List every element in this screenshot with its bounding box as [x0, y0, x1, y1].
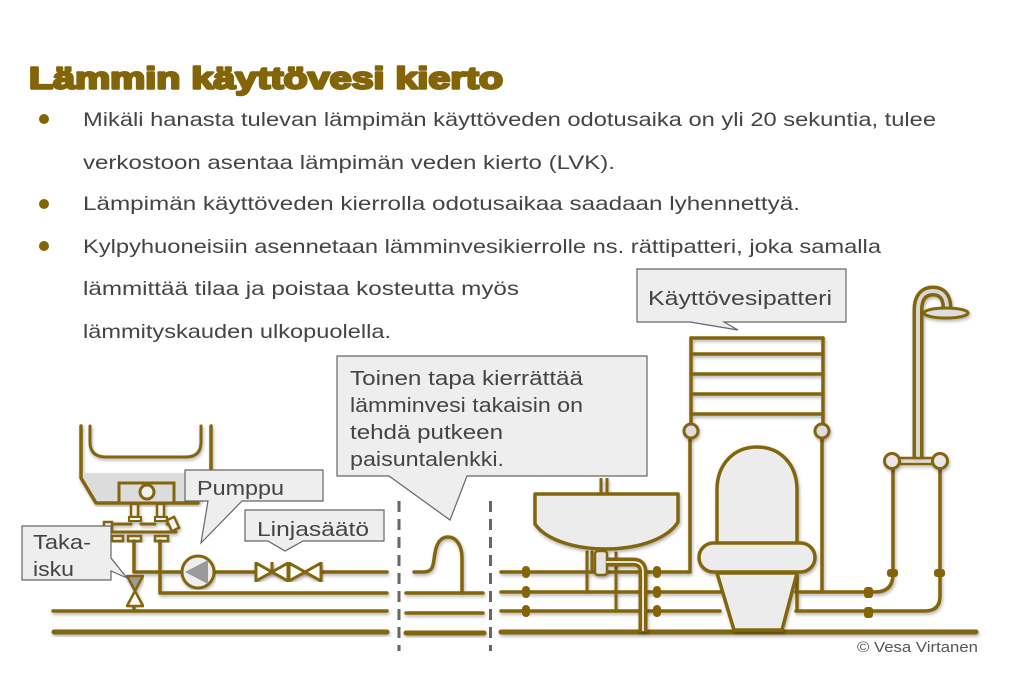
copyright: © Vesa Virtanen [857, 639, 978, 656]
water heater [81, 426, 211, 503]
right pipes [501, 437, 976, 632]
title: Lämmin käyttövesi kierto [29, 60, 503, 96]
callout: Pumppu: Pumppu [197, 478, 284, 500]
bullet list: verkostoon asentaa lämpimän veden kierto (LVK). [83, 152, 615, 174]
bullet list: lämmittää tilaa ja poistaa kosteutta myös [83, 278, 519, 300]
check valve [127, 576, 143, 606]
pipe couplings [522, 566, 945, 618]
callout: Taka-isku: isku [33, 559, 74, 581]
callout: expansion loop: lämminvesi takaisin on [350, 395, 583, 417]
shower [884, 291, 968, 468]
callout: Taka-isku [22, 526, 127, 581]
balancing valves [256, 563, 321, 581]
middle section: expansion loop [406, 537, 484, 633]
callout: Käyttövesipatteri [637, 269, 846, 330]
bullet list: Kylpyhuoneisiin asennetaan lämminvesikierrolle ns. rättipatteri, joka samalla [83, 236, 881, 258]
left pipes [53, 541, 387, 632]
callout: Taka-isku: Taka- [33, 532, 91, 554]
bullet list: Lämpimän käyttöveden kierrolla odotusaikaa saadaan lyhennettyä. [83, 193, 800, 215]
callout: expansion loop: Toinen tapa kierrättää [350, 368, 584, 390]
callout: Linjasäätö [245, 510, 384, 551]
sink [535, 478, 678, 632]
pump icon [182, 556, 214, 588]
callout: Käyttövesipatteri: Käyttövesipatteri [648, 288, 832, 310]
bullet list: lämmityskauden ulkopuolella. [83, 321, 391, 343]
callout: expansion loop: paisuntalenkki. [350, 449, 504, 471]
callout: Pumppu [185, 470, 323, 543]
bullet list [39, 109, 936, 343]
callout: expansion loop [337, 356, 647, 520]
toilet [699, 447, 815, 630]
callout: Linjasäätö: Linjasäätö [257, 519, 369, 541]
callout: expansion loop: tehdä putkeen [350, 422, 503, 444]
bullet list: Mikäli hanasta tulevan lämpimän käyttöveden odotusaika on yli 20 sekuntia, tulee [83, 109, 936, 131]
valve manifold [104, 504, 179, 541]
towel radiator [684, 338, 829, 438]
cut lines [399, 501, 490, 651]
